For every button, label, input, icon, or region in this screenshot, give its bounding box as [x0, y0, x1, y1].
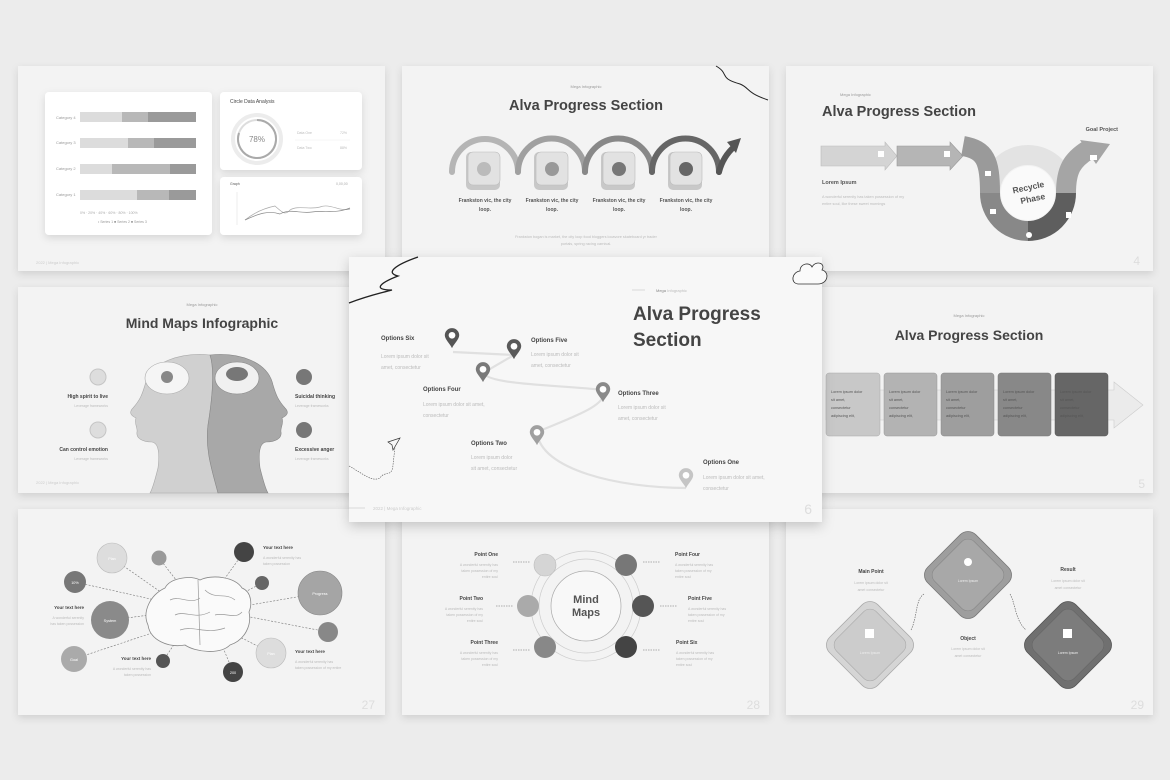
bar chart card: • Series 1 ■ Series 2 ■ Series 3 — [98, 220, 147, 224]
slide 4: mind maps heads: 2022 | Mega Infographic — [36, 480, 79, 485]
slide 5: boxes arrow — [786, 287, 1153, 493]
slide 7: brain mind map: A wonderful serenity — [52, 616, 84, 620]
slide 3: recycle phase: A wonderful serenity has taken possession of my — [822, 195, 904, 199]
slide 2: arches progress: loop. — [680, 207, 693, 213]
slide 4: mind maps heads: Can control emotion — [59, 447, 108, 453]
slide 9: diamonds: Lorem Ipsum — [860, 651, 880, 655]
slide 9: diamonds: Lorem Ipsum — [958, 579, 978, 583]
option labels: Options One — [703, 460, 740, 466]
slide 4: mind maps heads: Mega Infographic — [187, 302, 217, 307]
slide 5: boxes arrow: sit amet, — [1060, 398, 1074, 402]
line graph card — [220, 177, 362, 235]
slide 9: diamonds: Main Point — [858, 569, 884, 575]
slide 7: brain mind map — [18, 509, 385, 715]
slide 8: mind maps circle: entire soul — [482, 575, 498, 579]
slide 8: mind maps circle: taken possession of my — [446, 613, 483, 617]
slide 8: mind maps circle: Point Four — [675, 552, 700, 558]
slide 4: mind maps heads: Leverage frameworks — [295, 457, 329, 461]
slide 5: boxes arrow: Lorem ipsum dolor — [1060, 390, 1092, 394]
center label: Mind — [573, 594, 599, 606]
slide 8: mind maps circle: Point Three — [470, 640, 498, 646]
slide 6: featured center slide: amet, consectetur — [531, 363, 571, 369]
slide 2: arches progress: portals, spring racing carnival. — [561, 242, 611, 246]
slide 3: recycle phase: Lorem Ipsum — [822, 180, 857, 186]
slide 5: boxes arrow: sit amet, — [831, 398, 845, 402]
slide 5: boxes arrow: adipiscing elit, — [1003, 414, 1027, 418]
slide 9: diamonds: Object — [960, 636, 976, 642]
line graph card: 0,00,00 — [336, 182, 348, 186]
circle data card: 78% — [249, 135, 265, 144]
slide 2: arches progress: loop. — [613, 207, 626, 213]
slide 6: featured center slide: Lorem ipsum dolor sit — [618, 405, 666, 411]
slide 5: boxes arrow: adipiscing elit, — [946, 414, 970, 418]
option labels: Options Five — [531, 338, 568, 344]
slide 7: brain mind map: A wonderful serenity has — [295, 660, 333, 664]
slide 7: brain mind map: Plan — [108, 557, 116, 561]
slide 5: boxes arrow: sit amet, — [946, 398, 960, 402]
icon circles — [517, 554, 654, 658]
slide 8: mind maps circle: Point One — [474, 552, 498, 558]
slide 9: diamonds — [786, 509, 1153, 715]
option labels: Options Three — [618, 391, 659, 397]
slide 8: mind maps circle: A wonderful serenity has — [460, 651, 498, 655]
heads — [131, 354, 287, 493]
slide 6: featured center slide: Lorem ipsum dolor — [471, 455, 513, 461]
slide 2: arches progress: Mega Infographic — [571, 84, 601, 89]
slide 8: mind maps circle: Maps — [572, 607, 600, 619]
slide 2: arches progress: Frankston vic, the city — [660, 198, 713, 204]
slide 4: mind maps heads: Excessive anger — [295, 447, 334, 453]
slide 6: featured center slide: Lorem ipsum dolor sit — [381, 354, 429, 360]
slide 3: recycle phase: entire soul, like these sweet mornings — [822, 202, 885, 206]
slide 3: recycle phase: Mega Infographic — [840, 92, 871, 97]
slide 7: brain mind map: Your text here — [295, 649, 325, 654]
slide 8: mind maps circle: Point Two — [459, 596, 483, 602]
slide 9: diamonds: Lorem ipsum dolor sit — [854, 581, 888, 585]
slide 8: mind maps circle: Point Five — [688, 596, 712, 602]
slide 5: boxes arrow: adipiscing elit, — [1060, 414, 1084, 418]
slide 6: featured center slide: Lorem ipsum dolor sit — [531, 352, 579, 358]
slide 3: recycle phase: Goal Project — [1086, 127, 1118, 133]
slide 5: boxes arrow: sit amet, — [889, 398, 903, 402]
slide 8: mind maps circle: entire soul — [482, 663, 498, 667]
slide 8: mind maps circle: entire soul — [688, 619, 704, 623]
arrow band & ring: Recycle — [1012, 179, 1045, 195]
slide 8: mind maps circle: entire soul — [675, 575, 691, 579]
slide 9: diamonds: Result — [1060, 567, 1076, 573]
circle data card: 72% — [340, 131, 347, 135]
slide 9: diamonds: Lorem Ipsum — [1058, 651, 1078, 655]
slide 7: brain mind map: has taken possession — [50, 622, 84, 626]
slide 8: mind maps circle: taken possession of my — [461, 569, 498, 573]
slide 5: boxes arrow: Lorem ipsum dolor — [946, 390, 978, 394]
slide 5: boxes arrow: Lorem ipsum dolor — [1003, 390, 1035, 394]
slide 9: diamonds: Lorem ipsum dolor sit — [951, 647, 985, 651]
slide 6: featured center slide: 2022 | Mega Infographic — [373, 506, 422, 511]
slide 7: brain mind map: Progress — [312, 592, 328, 596]
slide 2: arches progress: Frankston vic, the city — [593, 198, 646, 204]
slide 2: arches progress: Frankston bogan is market, the city loop food bloggers locavore skateboard yr trader — [515, 235, 658, 239]
slide 7: brain mind map: taken possession of my entire — [295, 666, 341, 670]
slide 5: boxes arrow: sit amet, — [1003, 398, 1017, 402]
slide 8: mind maps circle: A wonderful serenity has — [675, 563, 713, 567]
slide 8: mind maps circle: A wonderful serenity has — [688, 607, 726, 611]
header — [632, 289, 645, 291]
icon boxes — [466, 152, 702, 190]
circle data card: Circle Data Analysis — [230, 99, 275, 105]
slide 7: brain mind map: Your text here — [263, 545, 293, 550]
slide 6: featured center slide: Mega Infographic — [656, 288, 687, 293]
slide 5: boxes arrow: Mega Infographic — [954, 313, 984, 318]
slide 2: arches progress: loop. — [479, 207, 492, 213]
bar chart card: Category 2 — [56, 166, 76, 171]
slide 6: featured center slide: Lorem ipsum dolor sit amet, — [423, 402, 485, 408]
slide 2: arches progress: Frankston vic, the city — [526, 198, 579, 204]
slide 6: featured center slide: amet, consectetur — [381, 365, 421, 371]
arches — [452, 138, 735, 172]
arrow band & ring: Phase — [1019, 191, 1046, 206]
slide 7: brain mind map: Your text here — [54, 605, 84, 610]
title: Alva Progress — [633, 304, 761, 325]
slide 6: featured center slide — [349, 257, 827, 522]
slide 7: brain mind map: taken possession — [124, 673, 151, 677]
slide 3: recycle phase: 4 — [1133, 254, 1140, 268]
route path — [453, 352, 686, 488]
doodles — [349, 257, 418, 303]
option labels: Options Two — [471, 441, 507, 447]
circle data card — [220, 92, 362, 170]
slide 8: mind maps circle: 28 — [747, 698, 760, 712]
line graph card: Graph — [230, 182, 240, 186]
slide 5: boxes arrow: Lorem ipsum dolor — [831, 390, 863, 394]
slide 4: mind maps heads: Leverage frameworks — [74, 457, 108, 461]
slide 2: arches progress — [402, 66, 769, 271]
slide 7: brain mind map: A wonderful serenity has — [263, 556, 301, 560]
slide 8: mind maps circle: entire soul — [467, 619, 483, 623]
slide 2: arches progress: Frankston vic, the city — [459, 198, 512, 204]
bar chart card — [45, 92, 212, 235]
slide 7: brain mind map: 200 — [230, 671, 236, 675]
option labels: Options Four — [423, 387, 461, 393]
slide 7: brain mind map: Plan — [267, 652, 275, 656]
slide 5: boxes arrow: consectetur — [1060, 406, 1080, 410]
slide 4: mind maps heads: Suicidal thinking — [295, 394, 335, 400]
slide 8: mind maps circle: entire soul — [676, 663, 692, 667]
slide 1: charts — [18, 66, 385, 271]
slide 8: mind maps circle — [402, 509, 769, 715]
slide 2: arches progress: loop. — [546, 207, 559, 213]
slide 9: diamonds: 29 — [1131, 698, 1144, 712]
bubbles — [61, 542, 342, 682]
slide 5: boxes arrow: adipiscing elit, — [889, 414, 913, 418]
slide 6: featured center slide: Lorem ipsum dolor sit amet, — [703, 475, 765, 481]
slide 9: diamonds: amet consectetur — [955, 654, 982, 658]
pins — [445, 328, 693, 488]
slide 4: mind maps heads: Leverage frameworks — [74, 404, 108, 408]
slide 6: featured center slide: consectetur — [423, 413, 449, 419]
slide 6: featured center slide: sit amet, consectetur — [471, 466, 517, 472]
slide 9: diamonds: amet consectetur — [858, 588, 885, 592]
slide 6: featured center slide: Section — [633, 330, 702, 351]
slide 6: featured center slide: consectetur — [703, 486, 729, 492]
bar chart card: 0% · 20% · 40% · 60% · 80% · 100% — [80, 211, 138, 215]
slide 5: boxes arrow: consectetur — [1003, 406, 1023, 410]
icons and labels — [90, 369, 106, 385]
slide 7: brain mind map: 27 — [362, 698, 375, 712]
slide 9: diamonds: Lorem ipsum dolor sit — [1051, 579, 1085, 583]
option labels — [381, 336, 740, 466]
slide 3: recycle phase — [786, 66, 1153, 271]
bar chart card: Category 4 — [56, 115, 76, 120]
slide 8: mind maps circle: taken possession of my — [676, 657, 713, 661]
slide 4: mind maps heads: High spirit to live — [67, 394, 108, 400]
slide 5: boxes arrow: consectetur — [946, 406, 966, 410]
slide 5: boxes arrow: adipiscing elit, — [831, 414, 855, 418]
option labels: Options Six — [381, 336, 415, 342]
slide 6: featured center slide: 6 — [804, 501, 812, 517]
bar chart card: Category 1 — [56, 192, 76, 197]
slide 8: mind maps circle: taken possession of my — [688, 613, 725, 617]
circle data card: Data Two — [297, 146, 312, 150]
circle data card: 88% — [340, 146, 347, 150]
slide 8: mind maps circle: taken possession of my — [461, 657, 498, 661]
title: Mind Maps Infographic — [126, 315, 278, 331]
slide 7: brain mind map: taken possession — [263, 562, 290, 566]
title: Alva Progress Section — [822, 104, 976, 120]
slide 7: brain mind map: A wonderful serenity has — [113, 667, 151, 671]
slide 5: boxes arrow: Lorem ipsum dolor — [889, 390, 921, 394]
slide 4: mind maps heads — [18, 287, 385, 493]
slide 9: diamonds: amet consectetur — [1055, 586, 1082, 590]
slide 5: boxes arrow: consectetur — [831, 406, 851, 410]
slide 5: boxes arrow: 5 — [1138, 477, 1145, 491]
slide 7: brain mind map: System — [104, 619, 116, 623]
title: Alva Progress Section — [509, 98, 663, 114]
slide 8: mind maps circle: taken possession of my — [675, 569, 712, 573]
slide 7: brain mind map: 10% — [71, 581, 79, 585]
footer — [349, 507, 365, 509]
slide 6: featured center slide: amet, consectetur — [618, 416, 658, 422]
slide 7: brain mind map: Your text here — [121, 656, 151, 661]
slide 8: mind maps circle: A wonderful serenity has — [676, 651, 714, 655]
circle data card: Data One — [297, 131, 312, 135]
slide 8: mind maps circle: A wonderful serenity has — [460, 563, 498, 567]
slide 4: mind maps heads: Leverage frameworks — [295, 404, 329, 408]
slide 8: mind maps circle: Point Six — [676, 640, 698, 646]
slide 1: charts: 2022 | Mega Infographic — [36, 260, 79, 265]
title: Alva Progress Section — [895, 327, 1043, 343]
bar chart card: Category 3 — [56, 140, 76, 145]
arrow band & ring — [821, 140, 1110, 238]
brain — [146, 577, 251, 651]
slide 7: brain mind map: Goal — [70, 658, 78, 662]
slide 5: boxes arrow: consectetur — [889, 406, 909, 410]
slide 8: mind maps circle: A wonderful serenity has — [445, 607, 483, 611]
